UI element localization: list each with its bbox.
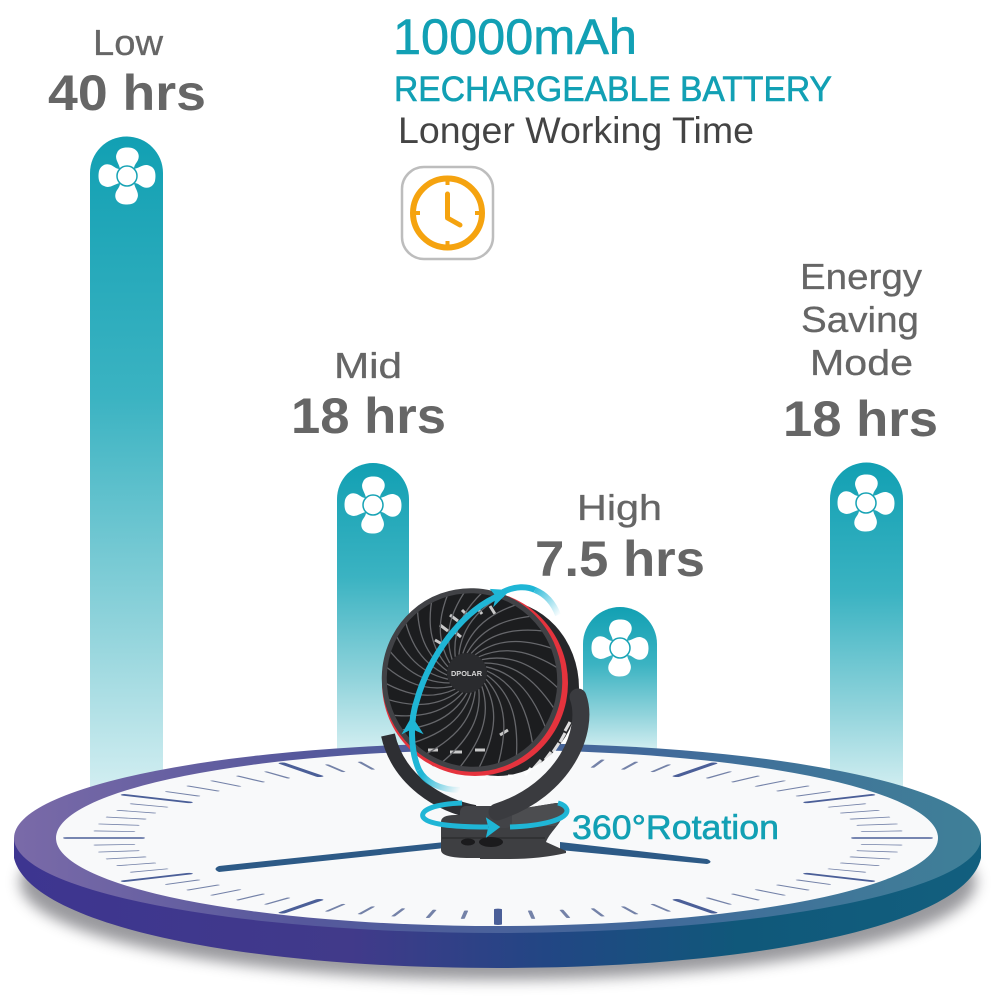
fan bracket left arm — [388, 735, 475, 812]
label: high — [535, 487, 705, 587]
label: low — [48, 22, 206, 121]
heading: 10000mAh: 10000mAh — [393, 9, 637, 65]
platform side — [14, 838, 981, 968]
icon: fan energy saving — [838, 475, 894, 531]
clock platform — [14, 743, 981, 980]
fan rear cage — [417, 600, 579, 778]
fan brand: DPOLAR — [451, 669, 483, 678]
clock face — [56, 750, 938, 926]
label: energy saving mode: Energy — [800, 256, 922, 297]
label: energy saving mode: Mode — [810, 342, 913, 383]
bar: low 40 hrs — [90, 136, 163, 790]
label: energy saving mode: Saving — [801, 299, 919, 340]
label: mid: 18 hrs — [291, 388, 446, 444]
arrow: horizontal 360 rotation — [423, 803, 567, 836]
text: longer working time: Longer Working Time — [398, 110, 754, 151]
fan interior — [387, 594, 557, 766]
label: mid — [291, 345, 446, 444]
label: energy saving mode — [783, 256, 938, 447]
bar: high 7.5 hrs — [583, 607, 657, 750]
label: low: 40 hrs — [48, 65, 206, 121]
platform rim — [14, 743, 981, 933]
fan bracket right arm — [497, 697, 581, 812]
icon: fan high — [592, 620, 648, 676]
label: high: High — [577, 487, 662, 528]
label: high: 7.5 hrs — [535, 531, 705, 587]
fan base — [441, 803, 566, 859]
text: 360 rotation: 360°Rotation — [572, 809, 779, 847]
clock ticks — [67, 752, 929, 924]
bar: energy saving 18 hrs — [830, 462, 903, 790]
icon: fan low — [99, 148, 155, 204]
label: low: Low — [93, 22, 164, 63]
clock hand: right — [560, 842, 710, 864]
fan blades — [387, 594, 557, 766]
fan hub — [447, 653, 487, 693]
heading: rechargeable battery: RECHARGEABLE BATTERY — [394, 70, 832, 109]
fan product — [381, 588, 590, 859]
fan red ring — [382, 590, 568, 776]
clock hand: left — [216, 842, 445, 872]
platform shadow — [20, 784, 976, 980]
label: energy saving mode: 18 hrs — [783, 391, 938, 447]
label: mid: Mid — [334, 345, 402, 386]
fan blade gaps — [428, 606, 508, 752]
bar: mid 18 hrs — [337, 463, 409, 750]
icon: fan mid — [345, 477, 401, 533]
arrow: vertical rotation — [404, 587, 558, 790]
icon: clock — [402, 167, 493, 259]
fan front guard — [359, 566, 585, 794]
